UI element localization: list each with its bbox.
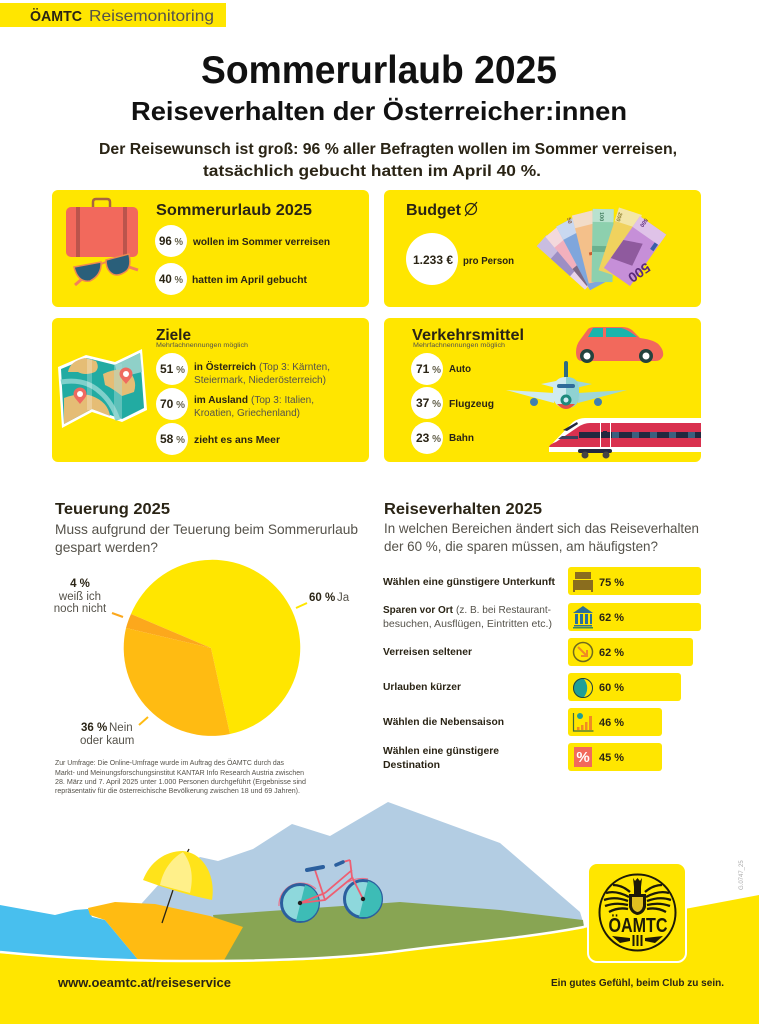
label: 60 % Ja: Ja <box>337 592 350 604</box>
white footer edge <box>0 927 584 961</box>
stat Bahn: Bahn <box>449 433 474 444</box>
question: Teuerung: gespart werden? <box>55 539 158 555</box>
subtitle: Reiseverhalten der Österreicher:innen <box>131 96 627 126</box>
bar: Sparen vor Ort: besuchen, Ausflügen, Eintritten etc.) <box>383 619 552 630</box>
icon: sunglasses <box>74 254 138 285</box>
note denominations: 200 <box>614 211 623 222</box>
label: 36 %: oder kaum <box>80 735 134 747</box>
beach <box>88 902 243 962</box>
label: 4 %: weiß ich <box>58 591 101 603</box>
bar: Verreisen seltener <box>383 638 693 666</box>
bar: Destination <box>383 743 662 771</box>
label: 36 %: Nein <box>109 722 133 734</box>
footnote <box>55 759 306 795</box>
bar: Sparen vor Ort <box>383 603 701 631</box>
stat Flugzeug: Flugzeug <box>449 399 494 410</box>
icon: arrow down <box>574 642 592 662</box>
stat budget: pro Person <box>463 256 514 267</box>
icon: lower wings <box>612 935 663 946</box>
stat 51 %: Steiermark, Niederösterreich) <box>194 375 326 386</box>
question: Teuerung <box>55 521 358 555</box>
stat Auto <box>411 353 471 385</box>
note: Mehrfachnennungen möglich <box>413 342 505 349</box>
illustration: landscape <box>0 802 584 962</box>
label: 4 %: noch nicht <box>54 603 107 615</box>
stat 70 %: Kroatien, Griechenland) <box>194 408 300 419</box>
question: Teuerung: Muss aufgrund der Teuerung beim Sommerurlaub <box>55 521 358 537</box>
slogan: Ein gutes Gefühl, beim Club zu sein. <box>551 977 724 989</box>
bar: Destination: Wählen eine günstigere <box>383 746 499 757</box>
note denominations: 100 <box>598 212 604 221</box>
stat 40 %: hatten im April gebucht <box>192 275 308 286</box>
panel: Ziele <box>52 318 369 462</box>
icon: season chart <box>574 713 594 731</box>
heading: Sommerurlaub 2025 <box>156 202 312 219</box>
logo: ÖAMTC <box>608 914 668 937</box>
icon: train <box>549 418 701 458</box>
stat 40 % <box>155 263 308 295</box>
footnote: Zur Umfrage: Die Online-Umfrage wurde im Auftrag des ÖAMTC durch das <box>55 759 284 767</box>
intro text: Der Reisewunsch ist groß: 96 % aller Befragten wollen im Sommer verreisen, <box>99 141 677 158</box>
header tag <box>0 3 226 27</box>
panel: Sommerurlaub 2025 <box>52 190 369 307</box>
bar: Nebensaison: 46 % <box>599 717 624 729</box>
stat 51 % <box>156 353 330 386</box>
label: 4 % <box>54 578 123 617</box>
title: Sommerurlaub 2025 <box>201 49 557 92</box>
icon: pin <box>120 368 132 384</box>
icon: stopwatch <box>573 678 593 698</box>
logo <box>588 863 686 962</box>
footer band <box>0 895 759 1024</box>
bar: Destination: 45 % <box>599 752 624 764</box>
question: Reiseverhalten: der 60 %, die sparen müssen, am häufigsten? <box>384 538 658 554</box>
bar: Nebensaison <box>383 708 662 736</box>
question: Reiseverhalten: In welchen Bereichen ändert sich das Reiseverhalten <box>384 520 699 536</box>
note value 500: 500 <box>625 260 653 286</box>
icon: percent <box>574 747 592 767</box>
stat 70 %: (Top 3: Italien, <box>251 395 314 406</box>
icon: pin <box>74 388 86 404</box>
intro text: tatsächlich gebucht hatten im April 40 %. <box>203 163 541 180</box>
question: Reiseverhalten <box>384 520 699 554</box>
stat budget <box>406 233 514 285</box>
bar: Urlauben kürzer <box>383 673 681 701</box>
panel: Budget <box>384 190 701 307</box>
footnote: Markt- und Meinungsforschungsinstitut KANTAR Info Research Austria zwischen <box>55 770 304 777</box>
icon: plane <box>506 361 627 409</box>
bar: Urlauben kürzer: 60 % <box>599 682 624 694</box>
intro text <box>99 141 677 180</box>
note denominations <box>565 211 648 228</box>
bar: Verreisen seltener: 62 % <box>599 647 624 659</box>
heading: Verkehrsmittel <box>412 327 524 344</box>
bar: Unterkunft <box>383 567 701 595</box>
stat 58 %: zieht es ans Meer <box>194 435 280 446</box>
stat 70 %: 70 % <box>160 397 185 411</box>
footnote: repräsentativ für die österreichische Bevölkerung zwischen 18 und 69 Jahren). <box>55 788 300 795</box>
icon: average symbol <box>465 202 477 216</box>
icon: eagle <box>604 878 671 915</box>
stat Flugzeug <box>411 387 494 419</box>
bar: Destination: Destination <box>383 760 440 771</box>
stat 96 % <box>155 225 330 257</box>
bar: Unterkunft: 75 % <box>599 577 624 589</box>
bar: Unterkunft: Wählen eine günstigere Unterkunft <box>383 577 556 588</box>
stat Auto: Auto <box>449 364 471 375</box>
bar: Urlauben kürzer: Urlauben kürzer <box>383 682 461 693</box>
heading: Reiseverhalten 2025: Reiseverhalten 2025 <box>384 501 542 518</box>
stat 70 % <box>156 388 314 420</box>
stat 51 %: (Top 3: Kärnten, <box>259 362 330 373</box>
icon: bed <box>573 572 593 592</box>
stat 58 %: 58 % <box>160 432 185 446</box>
icon: bicycle <box>279 860 382 922</box>
icon: car <box>576 327 663 363</box>
icon: map <box>58 349 147 428</box>
heading: Budget <box>406 202 462 219</box>
pie chart <box>54 560 350 747</box>
stat Flugzeug: 37 % <box>416 396 441 410</box>
bar: Sparen vor Ort: 62 % <box>599 612 624 624</box>
label: 36 % <box>80 717 148 747</box>
heading: Ziele <box>156 327 191 344</box>
stat 70 %: im Ausland <box>194 395 248 406</box>
panel: Verkehrsmittel <box>384 318 701 462</box>
note denominations: 500 <box>638 217 648 228</box>
footnote: 28. März und 7. April 2025 unter 1.000 Personen durchgeführt (Ergebnisse sind <box>55 779 306 786</box>
mountains <box>142 802 584 960</box>
stat Bahn <box>411 422 474 454</box>
note denominations: 50 <box>565 217 572 224</box>
stat 96 %: wollen im Sommer verreisen <box>192 237 330 248</box>
stat Auto: 71 % <box>416 362 441 376</box>
label: 4 %: 4 % <box>70 578 90 590</box>
stat 51 %: in Österreich <box>194 360 256 373</box>
water <box>0 905 140 962</box>
bar: Nebensaison: Wählen die Nebensaison <box>383 717 504 728</box>
label: 36 %: 36 % <box>81 722 107 734</box>
icon: percent: % <box>576 749 590 766</box>
bar: Sparen vor Ort: (z. B. bei Restaurant- <box>456 605 551 616</box>
label: 60 % Ja: 60 % <box>309 592 335 604</box>
header tag: Reisemonitoring <box>89 8 214 25</box>
meadow <box>213 902 584 962</box>
header tag: ÖAMTC <box>30 8 82 25</box>
icon: suitcase <box>66 199 138 257</box>
website: www.oeamtc.at/reiseservice <box>57 975 231 990</box>
stat 51 %: 51 % <box>160 362 185 376</box>
icon: euro notes <box>537 208 666 290</box>
icon: umbrella <box>143 849 213 923</box>
bar: Sparen vor Ort: Sparen vor Ort <box>383 605 454 616</box>
stat 40 %: 40 % <box>159 272 183 286</box>
note: Mehrfachnennungen möglich <box>156 342 248 349</box>
bar: Verreisen seltener: Verreisen seltener <box>383 647 472 658</box>
stat 96 %: 96 % <box>159 234 183 248</box>
stat budget: 1.233 € <box>413 253 453 267</box>
stat Bahn: 23 % <box>416 431 441 445</box>
heading: Teuerung 2025: Teuerung 2025 <box>55 501 170 518</box>
print code: G.0747_25 <box>739 860 745 890</box>
icon: museum <box>573 606 593 628</box>
label: 60 % Ja <box>296 592 350 608</box>
stat 58 % <box>156 423 280 455</box>
